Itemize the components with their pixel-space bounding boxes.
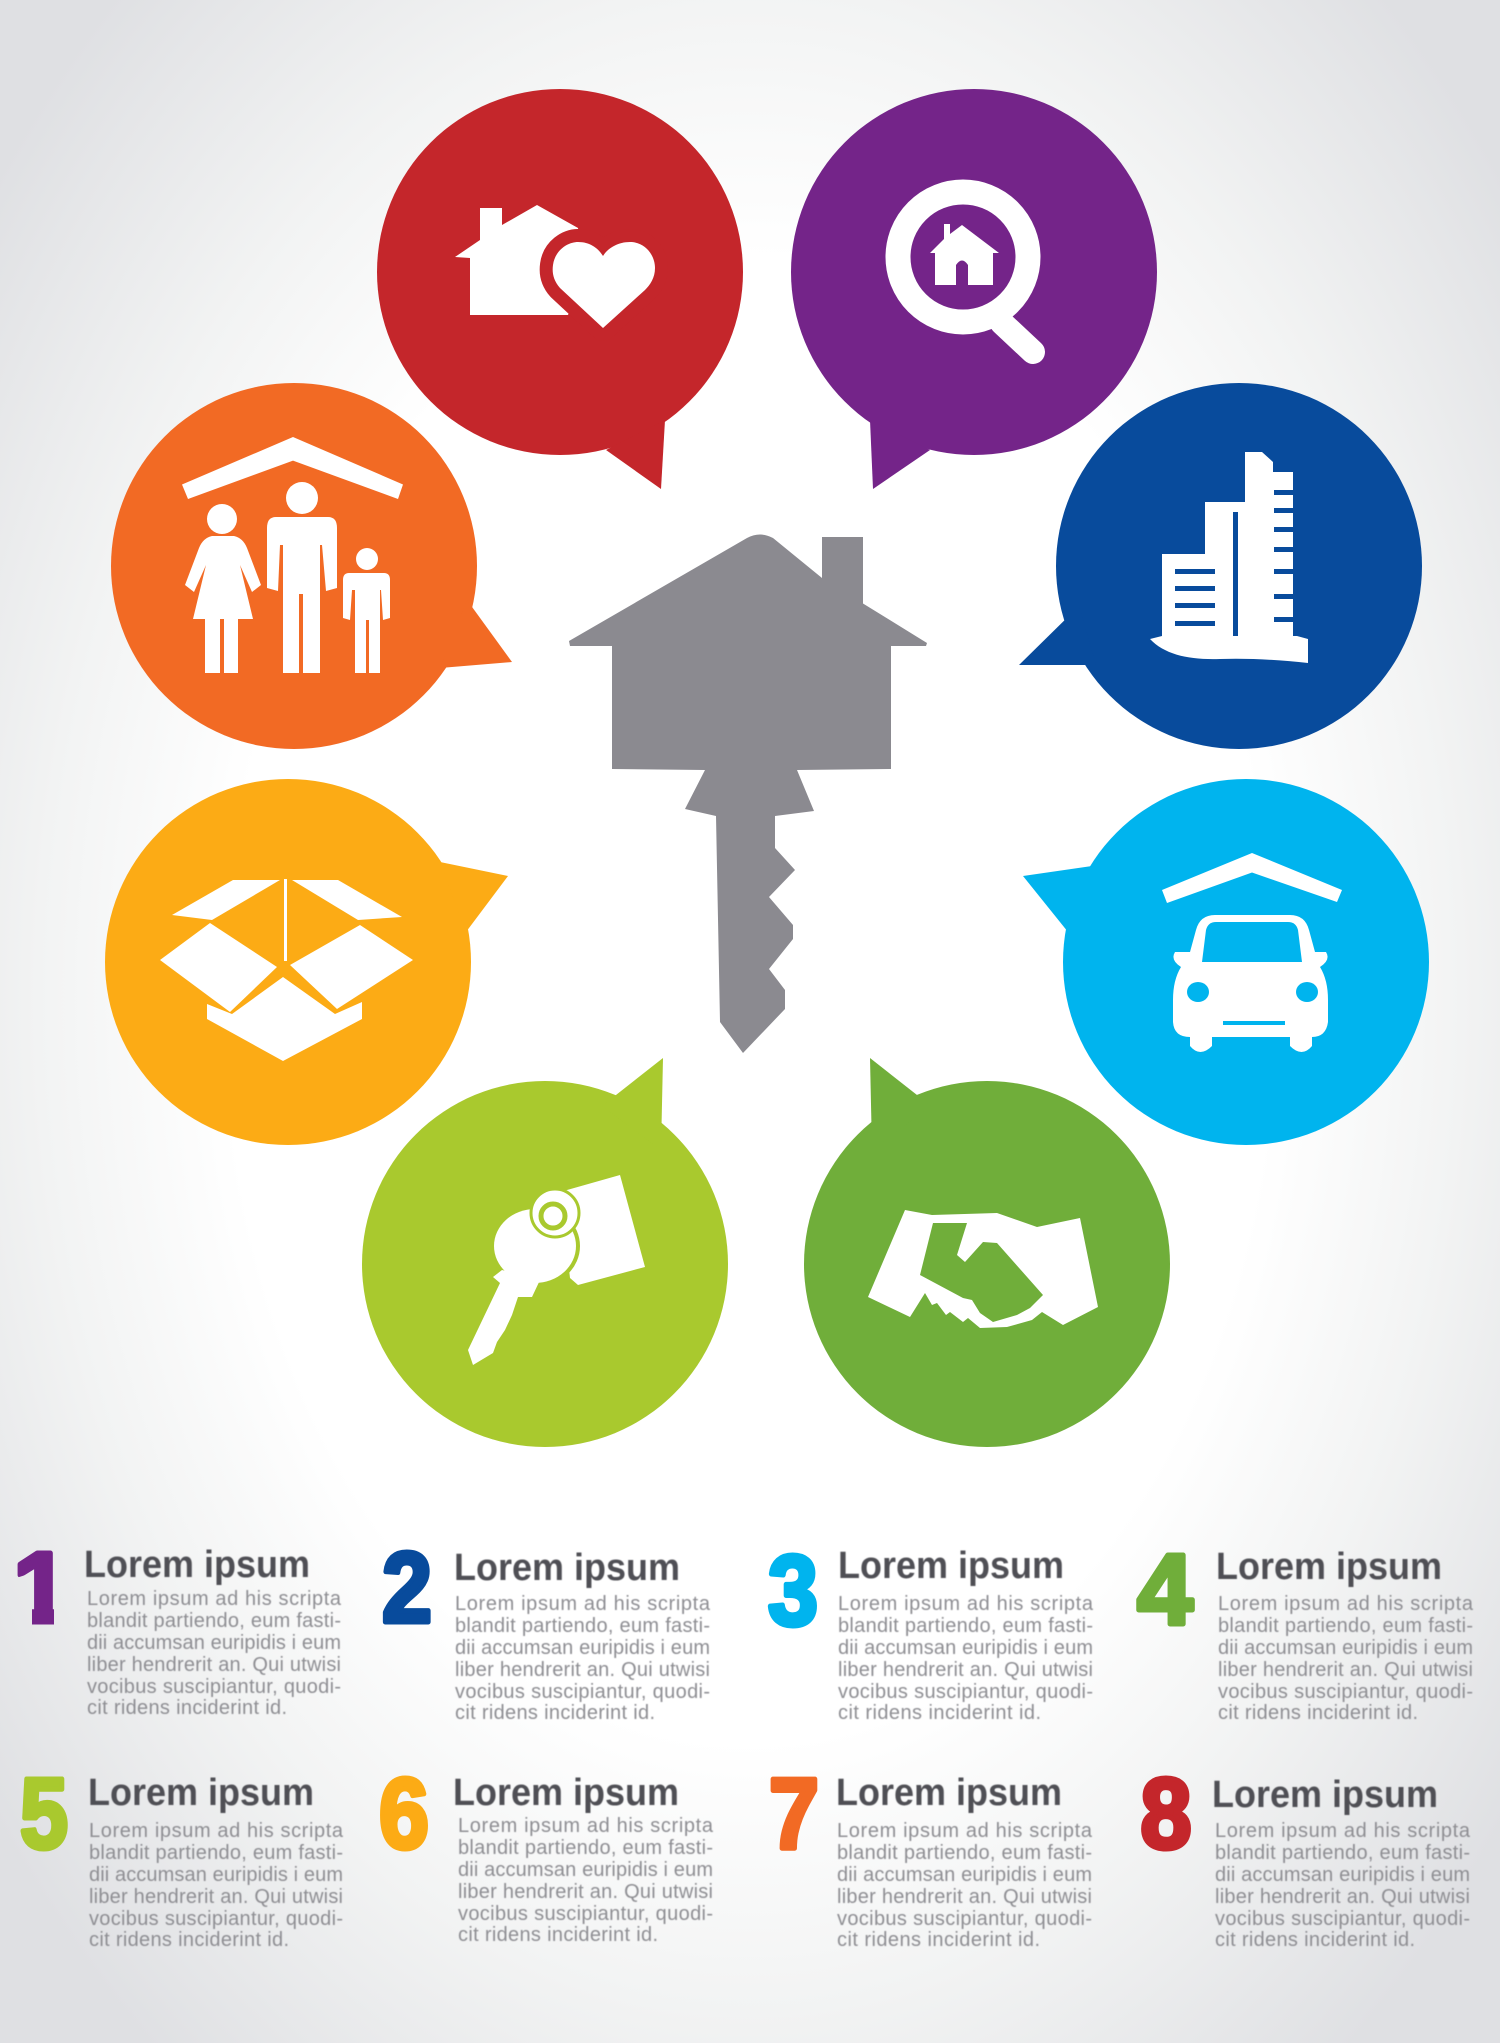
body text 6: vocibus suscipiantur, quodi- bbox=[458, 1903, 713, 1925]
body text 4: Lorem ipsum ad his scripta bbox=[1218, 1593, 1474, 1615]
item 5 bbox=[20, 1758, 344, 1951]
body text 2: blandit partiendo, eum fasti- bbox=[455, 1615, 710, 1637]
speech bubble 2: purple, magnifier on house bbox=[791, 89, 1157, 489]
heading 6: Lorem ipsum bbox=[453, 1772, 679, 1814]
body text 5: Lorem ipsum ad his scripta bbox=[89, 1820, 344, 1842]
woman figure bbox=[185, 504, 261, 673]
icon: open cardboard box bbox=[160, 879, 413, 1061]
item 1 bbox=[18, 1548, 342, 1714]
body text 2: dii accumsan euripidis i eum bbox=[455, 1637, 710, 1659]
body text 6: blandit partiendo, eum fasti- bbox=[458, 1837, 713, 1859]
number 3: 3 bbox=[768, 1535, 818, 1647]
speech bubble 7: amber, open box bbox=[105, 779, 508, 1145]
heading 4: Lorem ipsum bbox=[1216, 1546, 1442, 1588]
body text 5: liber hendrerit an. Qui utwisi bbox=[89, 1886, 343, 1908]
body text 1: vocibus suscipiantur, quodi- bbox=[87, 1676, 341, 1698]
number 6: 6 bbox=[379, 1758, 429, 1870]
speech bubble 4: cyan, car in garage bbox=[1023, 779, 1429, 1145]
speech bubble 3: dark blue, buildings bbox=[1019, 383, 1422, 749]
icon: city buildings bbox=[1150, 452, 1308, 663]
body text 3: liber hendrerit an. Qui utwisi bbox=[838, 1659, 1093, 1681]
body text 8: vocibus suscipiantur, quodi- bbox=[1215, 1908, 1470, 1930]
body text 3: blandit partiendo, eum fasti- bbox=[838, 1615, 1093, 1637]
body text 5 bbox=[89, 1820, 344, 1951]
body text 6: cit ridens inciderint id. bbox=[458, 1924, 658, 1946]
body text 2: cit ridens inciderint id. bbox=[455, 1702, 655, 1724]
body text 4: dii accumsan euripidis i eum bbox=[1218, 1637, 1473, 1659]
body text 5: dii accumsan euripidis i eum bbox=[89, 1864, 343, 1886]
body text 7: vocibus suscipiantur, quodi- bbox=[837, 1908, 1092, 1930]
item 3 bbox=[768, 1535, 1094, 1724]
child figure bbox=[343, 548, 390, 673]
body text 8: blandit partiendo, eum fasti- bbox=[1215, 1842, 1470, 1864]
body text 6: liber hendrerit an. Qui utwisi bbox=[458, 1881, 713, 1903]
body text 7: liber hendrerit an. Qui utwisi bbox=[837, 1886, 1092, 1908]
body text 1: blandit partiendo, eum fasti- bbox=[87, 1610, 341, 1632]
speech bubble 6: lime, key with tag bbox=[362, 1058, 728, 1447]
body text 1 bbox=[87, 1588, 342, 1719]
body text 2: Lorem ipsum ad his scripta bbox=[455, 1593, 711, 1615]
number 2: 2 bbox=[382, 1532, 432, 1644]
body text 2: liber hendrerit an. Qui utwisi bbox=[455, 1659, 710, 1681]
body text 1: Lorem ipsum ad his scripta bbox=[87, 1588, 342, 1610]
speech bubble 8: orange, family under roof bbox=[111, 383, 512, 749]
icon: family under roof bbox=[182, 437, 403, 673]
body text 7: blandit partiendo, eum fasti- bbox=[837, 1842, 1092, 1864]
icon: magnifying glass with house bbox=[898, 192, 1033, 352]
number 8: 8 bbox=[1140, 1758, 1192, 1870]
speech bubble 5: green, handshake bbox=[804, 1058, 1170, 1447]
body text 4: liber hendrerit an. Qui utwisi bbox=[1218, 1659, 1473, 1681]
body text 3: dii accumsan euripidis i eum bbox=[838, 1637, 1093, 1659]
body text 6 bbox=[458, 1815, 714, 1946]
body text 2 bbox=[455, 1593, 711, 1724]
item 4 bbox=[1137, 1534, 1474, 1724]
number 5: 5 bbox=[20, 1758, 68, 1870]
number 7: 7 bbox=[769, 1758, 819, 1870]
body text 6: Lorem ipsum ad his scripta bbox=[458, 1815, 714, 1837]
heading 2: Lorem ipsum bbox=[454, 1547, 680, 1589]
body text 8: liber hendrerit an. Qui utwisi bbox=[1215, 1886, 1470, 1908]
number 4: 4 bbox=[1137, 1534, 1193, 1646]
body text 7: cit ridens inciderint id. bbox=[837, 1929, 1040, 1951]
item 2 bbox=[382, 1532, 711, 1724]
heading 5: Lorem ipsum bbox=[88, 1772, 314, 1814]
body text 4: cit ridens inciderint id. bbox=[1218, 1702, 1418, 1724]
body text 4: vocibus suscipiantur, quodi- bbox=[1218, 1681, 1473, 1703]
body text 7 bbox=[837, 1820, 1093, 1951]
item 8 bbox=[1140, 1758, 1471, 1951]
body text 4 bbox=[1218, 1593, 1474, 1724]
icon: handshake bbox=[868, 1210, 1098, 1328]
body text 8 bbox=[1215, 1820, 1471, 1951]
body text 4: blandit partiendo, eum fasti- bbox=[1218, 1615, 1473, 1637]
icon: house with heart bbox=[455, 205, 655, 328]
man figure bbox=[267, 482, 337, 673]
body text 3 bbox=[838, 1593, 1094, 1724]
heading 7: Lorem ipsum bbox=[836, 1772, 1062, 1814]
body text 6: dii accumsan euripidis i eum bbox=[458, 1859, 713, 1881]
body text 5: cit ridens inciderint id. bbox=[89, 1929, 289, 1951]
speech bubble 1: red, house with heart bbox=[377, 89, 743, 489]
body text 1: dii accumsan euripidis i eum bbox=[87, 1632, 341, 1654]
body text 5: vocibus suscipiantur, quodi- bbox=[89, 1908, 343, 1930]
body text 8: Lorem ipsum ad his scripta bbox=[1215, 1820, 1471, 1842]
icon: key with tag bbox=[468, 1175, 645, 1365]
item 6 bbox=[379, 1758, 714, 1946]
heading 3: Lorem ipsum bbox=[838, 1545, 1064, 1587]
body text 5: blandit partiendo, eum fasti- bbox=[89, 1842, 343, 1864]
body text 8: cit ridens inciderint id. bbox=[1215, 1929, 1415, 1951]
body text 7: dii accumsan euripidis i eum bbox=[837, 1864, 1092, 1886]
body text 7: Lorem ipsum ad his scripta bbox=[837, 1820, 1093, 1842]
icon: car under roof bbox=[1162, 853, 1342, 1052]
number 1: 1 bbox=[13, 1532, 69, 1644]
central icon: house-shaped key bbox=[569, 534, 927, 1053]
body text 1: cit ridens inciderint id. bbox=[87, 1697, 287, 1719]
heading 1: Lorem ipsum bbox=[84, 1544, 310, 1586]
body text 3: vocibus suscipiantur, quodi- bbox=[838, 1681, 1093, 1703]
body text 1: liber hendrerit an. Qui utwisi bbox=[87, 1654, 341, 1676]
heading 8: Lorem ipsum bbox=[1212, 1774, 1438, 1816]
body text 3: cit ridens inciderint id. bbox=[838, 1702, 1041, 1724]
body text 8: dii accumsan euripidis i eum bbox=[1215, 1864, 1470, 1886]
body text 3: Lorem ipsum ad his scripta bbox=[838, 1593, 1094, 1615]
item 7 bbox=[769, 1758, 1093, 1951]
body text 2: vocibus suscipiantur, quodi- bbox=[455, 1681, 710, 1703]
